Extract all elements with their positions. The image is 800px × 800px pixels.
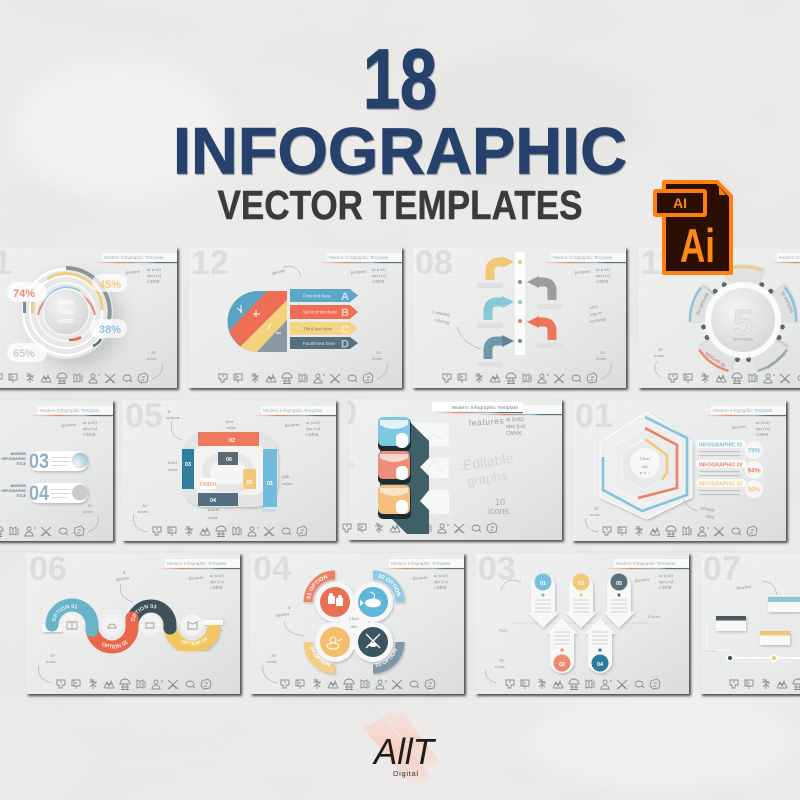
panel header: [432, 402, 523, 413]
panel: 06 wave: Modern Infographic Template: [167, 561, 227, 566]
panel: 07 timeline: Timeline: [735, 584, 752, 591]
chart: five option gear: 03 OPTION: [765, 351, 787, 370]
note: editable data: data: [706, 513, 716, 520]
panel: 04 four circles: eps (cs): [434, 579, 449, 584]
ribbon A: A: [341, 291, 349, 303]
panel: 03 04 pills: eps (cs): [83, 426, 98, 431]
icon tile: yellow: [378, 485, 411, 519]
ribbon B: [290, 305, 358, 319]
legend: infographic 02: 94%: [747, 468, 761, 474]
panel: 08 arrows: easy: [589, 303, 599, 310]
panel: 08 arrows: recharge: [589, 316, 606, 324]
card 02: 02: [559, 662, 565, 668]
handwritten notes: eps (cs): [506, 424, 526, 430]
panel: 03 timeline arrows: ai (cs5): [659, 573, 673, 578]
card 01: 01: [540, 581, 546, 587]
timeline card: teal: [768, 597, 800, 612]
legend: infographic 03: [696, 479, 763, 498]
chart: five option gear: 5: [733, 302, 753, 343]
panel: 5 options gear: 11: [641, 244, 677, 282]
backing rings: [315, 582, 393, 662]
legend: infographic 02: INFOGRAPHIC 02: [699, 462, 743, 468]
panel: rings template: features: [126, 269, 141, 275]
chart: five option gear: 02 OPTION: [780, 290, 795, 314]
arrow: grey: [527, 276, 563, 309]
clipped panel number: 0: [338, 394, 357, 432]
timeline line: [498, 614, 660, 633]
panel: 07 timeline: START: [705, 648, 718, 653]
ribbon D: D: [341, 338, 349, 350]
panel: 06 wave: features: [189, 575, 204, 581]
panel: 04 four circles: [250, 550, 468, 698]
panel: 05 spiral: ai (cs5): [306, 420, 320, 425]
option pill 04: 04: [29, 482, 49, 505]
card 04: 04: [597, 662, 604, 668]
panel: 01 hexagon: eps (cs): [756, 426, 771, 431]
panel: 03 timeline arrows: [475, 550, 691, 696]
chart: rounded spiral: value: [282, 481, 292, 486]
panel: 08 arrows: way to: [589, 310, 603, 317]
panel: rings template: 10: [151, 350, 156, 355]
long shadow shape: [380, 417, 429, 534]
panel: 08 arrows: Modern Infographic Template: [553, 255, 613, 260]
panel: 03 04 pills: features: [62, 422, 77, 428]
option pill 03: INFOGRAPHIC: [2, 457, 26, 461]
legend: infographic 03: INFOGRAPHIC 03: [699, 482, 743, 488]
panel: rings template: [0, 244, 179, 390]
panel: 03 04 pills: [0, 400, 115, 543]
legend: infographic 01: 79%: [747, 448, 761, 454]
icon tile: blue: [378, 417, 411, 451]
label pill: 65%: [7, 343, 47, 362]
panel: 05 spiral: eps (cs): [306, 426, 321, 431]
panel: 04 four circles: 04: [253, 550, 291, 588]
panel: 08 arrows: features: [575, 269, 590, 275]
title: INFOGRAPHIC: INFOGRAPHIC: [173, 114, 627, 188]
ribbon C: C: [341, 324, 349, 336]
chart: striped half pill: [228, 291, 287, 352]
legend: infographic 01: INFOGRAPHIC 01: [699, 442, 743, 448]
panel: 01 hexagon: icons: [590, 512, 600, 517]
AI file icon: [655, 182, 731, 273]
panel: 05 spiral: Modern Infographic Template: [263, 408, 323, 413]
chart: rounded spiral: 06: [226, 457, 232, 463]
panel: 07 timeline: [700, 550, 800, 696]
panel: 12 ribbons: options: [271, 268, 286, 276]
logo: AllT Digital: AllT: [372, 731, 437, 772]
arrow: orange: [527, 316, 563, 348]
logo: AllT Digital: Digital: [393, 769, 419, 778]
panel: 12 ribbons: icons: [372, 356, 382, 361]
panel: 03 04 pills: Modern Infographic Template: [40, 408, 100, 413]
panel: 01 hexagon: [572, 397, 788, 543]
option pill 04: INFOGRAPHIC: [2, 489, 26, 493]
panel: 05 spiral: CMYK: [306, 432, 319, 437]
card 05: [603, 574, 635, 628]
icon tile: orange: [378, 451, 411, 484]
panel: 03 timeline arrows: eps (cs): [659, 579, 674, 584]
panel: 03 04 pills: 10: [87, 503, 92, 508]
chart: rounded spiral: START: [262, 508, 277, 513]
panel: 04 four circles: Modern Infographic Template: [391, 561, 451, 566]
AI file icon: AI: [673, 195, 687, 211]
arrow: blue grey: [477, 335, 514, 367]
panel: 08 arrows: CMYK: [596, 279, 609, 284]
panel: 05 spiral: 05: [125, 397, 163, 435]
arrow: yellow: [477, 256, 514, 288]
panel: 06 wave: options: [115, 575, 130, 582]
handwritten notes: ai (cs5): [506, 417, 524, 423]
panel: rings template: eps (cs): [147, 273, 162, 278]
arrow: teal: [477, 296, 514, 328]
panel: 06 wave: 4: [123, 570, 126, 575]
panel: 07 timeline: 07: [703, 550, 741, 588]
panel: 06 wave: eps (cs): [210, 579, 225, 584]
chart: five option gear: 05 OPTION: [704, 351, 727, 368]
chart: wave ribbon: OPTION 02: [102, 640, 128, 649]
ribbon C: [290, 322, 358, 336]
chart: rounded spiral: 03: [185, 462, 191, 468]
panel: 01 hexagon: features: [732, 424, 747, 430]
handwritten notes: graphs: [466, 468, 508, 489]
chart: rounded spiral: fifth: [282, 474, 290, 479]
card 05: 05: [616, 581, 622, 587]
circle: puzzle: [320, 587, 350, 617]
label pill: 74%: [7, 282, 47, 302]
chart: rounded spiral: [168, 419, 292, 520]
panel: 03 timeline arrows: 10: [499, 658, 504, 663]
chart: rounded spiral: value: [168, 467, 178, 472]
timeline card: dark: [716, 616, 746, 631]
ribbon C: Third text here: [303, 326, 333, 332]
panel: 06 wave: 10: [50, 653, 55, 658]
panel: 08 arrows: 10: [600, 350, 605, 355]
panel: 03 timeline arrows: CMYK: [659, 585, 672, 590]
panel: 08 arrows: [412, 244, 628, 390]
panel: 08 arrows: 08: [415, 244, 453, 282]
panel: 04 four circles: features: [413, 575, 428, 581]
card 03: 03: [578, 581, 584, 587]
ribbon A: [290, 289, 358, 303]
chart: nested hexagons: title: [641, 464, 649, 469]
title: 18: 18: [363, 32, 437, 126]
panel: 08 arrows: coloring: [434, 317, 451, 325]
chart: rounded spiral: fourth: [208, 507, 220, 512]
center note: title: [350, 624, 358, 629]
card 04: [584, 618, 616, 673]
panel: 12 ribbons: [188, 244, 404, 390]
ribbon A: First text here: [303, 294, 331, 298]
legend: infographic 02: [696, 460, 763, 479]
option pill 04: MODERN: [10, 484, 26, 488]
panel: 03 timeline arrows: 03: [478, 550, 516, 588]
panel: 04 four circles: CMYK: [434, 585, 447, 590]
option pill 03: 03: [29, 450, 49, 473]
panel: 08 arrows: icons: [596, 356, 606, 361]
subtitle: VECTOR TEMPLATES: VECTOR TEMPLATES: [218, 182, 582, 228]
panel: 03 04 pills: ai (cs5): [83, 420, 97, 425]
option pill 03: TITLE: [16, 462, 27, 466]
ribbon B: B: [341, 307, 349, 319]
logo: AllT Digital: [363, 712, 440, 786]
panel: 06 wave: ai (cs5): [210, 573, 224, 578]
circle: crossed tools: [358, 627, 388, 657]
handwritten notes: CMYK: [506, 431, 522, 437]
panel: rings template: icons: [147, 356, 157, 361]
handwritten notes: .Editable: [458, 450, 514, 474]
chart: nested hexagons: [600, 412, 692, 519]
chart: rounded spiral: 04: [210, 498, 217, 504]
arc labels: 01 OPTION: [306, 574, 328, 599]
chart: five option gear: [686, 263, 800, 377]
panel: 05 spiral: options: [166, 415, 180, 420]
panel: 12 ribbons: Modern Infographic Template: [329, 255, 389, 260]
chart: rounded spiral: 01: [267, 481, 273, 487]
chart: rounded spiral: value: [208, 515, 218, 520]
arc labels: [306, 574, 401, 667]
chart: rounded spiral: FINISH: [200, 482, 217, 488]
chart: wave ribbon: [42, 598, 225, 654]
panel: 05 spiral: features: [285, 422, 300, 428]
timeline line: Future: [647, 614, 660, 619]
panel: 5 options gear: [638, 244, 800, 390]
label pill: 74%: 74%: [13, 288, 35, 300]
panel: 03 04 pills: CMYK: [83, 432, 96, 437]
chart: wave ribbon: OPTION 01: [52, 604, 77, 622]
center note: [349, 616, 359, 629]
chart: concentric rings: [19, 265, 122, 368]
panel header: Modern Infographic Template: [452, 405, 518, 410]
timeline line: Past: [498, 628, 508, 633]
circle: fish: [358, 587, 388, 617]
panel: 08 arrows: ai (cs5): [596, 267, 610, 272]
chart: five option gear: OPTIONS: [733, 337, 753, 342]
handwritten notes: icons: [488, 506, 510, 516]
handwritten notes: e: [348, 459, 354, 471]
panel: 06 wave: [26, 550, 244, 698]
panel: 08 arrows: eps (cs): [596, 273, 611, 278]
chart: rounded spiral: third: [168, 460, 177, 465]
panel: rings template: ai (cs5): [147, 267, 161, 272]
chart: concentric rings: HERE: [58, 319, 74, 325]
panel: 5 options gear: 10: [658, 347, 663, 352]
panel: 04 four circles: ai (cs5): [434, 573, 448, 578]
panel: 04 four circles: 4: [288, 605, 291, 610]
chart: wave ribbon: OPTION 04: [181, 637, 208, 646]
chart: wave ribbon: OPTION 03: [131, 604, 156, 622]
circle: user: [320, 627, 350, 657]
label pill: 45%: 45%: [99, 279, 121, 291]
chart: rounded spiral: 02: [229, 438, 235, 444]
panel: 01 hexagon: 10: [594, 506, 599, 511]
option pill 04: TITLE: [16, 494, 27, 498]
panel: 5 options gear: icons: [654, 353, 664, 358]
handwritten notes: [348, 416, 526, 516]
handwritten notes: 10: [495, 497, 505, 507]
graph cards: [413, 423, 449, 514]
ribbon B: Second text here: [303, 310, 338, 314]
chart: concentric rings: YOUR: [58, 300, 74, 306]
AI file icon: Ai: [680, 219, 715, 272]
label pill: 65%: 65%: [13, 348, 35, 360]
label pill: 45%: [92, 274, 127, 292]
legend: infographic 03: 30%: [747, 486, 761, 494]
panel: 01 hexagon: CMYK: [756, 432, 769, 437]
panel: 01 hexagon: Modern Infographic Template: [713, 408, 773, 413]
panel: 05 spiral: 6: [168, 409, 171, 414]
center note: Clear: [349, 616, 359, 621]
panel: 03 04 pills: icons: [83, 509, 93, 514]
panel: 12 ribbons: eps (cs): [372, 273, 387, 278]
label pill: 38%: 38%: [99, 324, 121, 336]
chart: concentric rings: TITLE: [58, 310, 74, 316]
label pill: 38%: [90, 319, 127, 338]
card 02: [546, 618, 578, 673]
ribbon D: [290, 337, 358, 350]
panel: 03 timeline arrows: Modern Infographic Template: [616, 561, 676, 566]
panel: rings template: CMYK: [147, 279, 160, 284]
card 03: [565, 574, 597, 628]
option pill 03: MODERN: [10, 452, 26, 456]
note: editable data: [683, 499, 716, 520]
ribbon D: Fourth text here: [303, 341, 335, 346]
arc labels: 03 OPTION: [376, 648, 397, 667]
panel: editable graphs: [338, 394, 564, 542]
arc labels: 02 OPTION: [378, 574, 401, 596]
option pill 03: [2, 450, 88, 473]
panel: 05 spiral: [122, 397, 338, 543]
panel: 01 hexagon: ai (cs5): [756, 420, 770, 425]
chart: five option gear: 04 OPTION: [695, 292, 710, 315]
arc labels: 04 OPTION: [310, 646, 330, 666]
panel: 12 ribbons: 10: [376, 350, 381, 355]
panel: 06 wave: 06: [29, 550, 67, 588]
panel: 08 arrows: 5 editable: [432, 309, 451, 318]
note: editable data: editable: [700, 505, 715, 513]
panel: 01 hexagon: 01: [575, 397, 613, 435]
chart: rounded spiral: value: [226, 425, 236, 430]
timeline card: yellow: [760, 631, 790, 645]
panel: 05 spiral: 10: [142, 503, 147, 508]
panel: 04 four circles: options: [275, 611, 290, 618]
panel: 12 ribbons: ai (cs5): [372, 267, 386, 272]
panel: 05 spiral: icons: [138, 509, 148, 514]
panel: 12 ribbons: features: [351, 269, 366, 275]
panel: 03 timeline arrows: icons: [495, 664, 505, 669]
panel: rings template: Modern Infographic Template: [104, 255, 164, 260]
panel: 12 ribbons: 12: [191, 244, 229, 282]
legend: infographic 01: [696, 440, 763, 459]
timeline strip: [515, 252, 525, 355]
panel: 12 ribbons: CMYK: [372, 279, 385, 284]
panel: 06 wave: icons: [46, 659, 56, 664]
chart: rounded spiral: first: [226, 419, 234, 424]
panel: 03 timeline arrows: features: [635, 577, 650, 583]
option pill 04: [2, 482, 88, 505]
chart: nested hexagons: Clear: [640, 456, 650, 461]
panel: 04 four circles: 10: [271, 653, 276, 658]
chart: rounded spiral: 05: [246, 480, 253, 486]
handwritten notes: features: [468, 416, 505, 428]
panel: 06 wave: CMYK: [210, 585, 223, 590]
timeline line and nodes: [707, 625, 800, 662]
chart: quad option arcs: [308, 575, 400, 669]
panel: 04 four circles: icons: [267, 659, 277, 664]
card 01: [527, 574, 559, 628]
